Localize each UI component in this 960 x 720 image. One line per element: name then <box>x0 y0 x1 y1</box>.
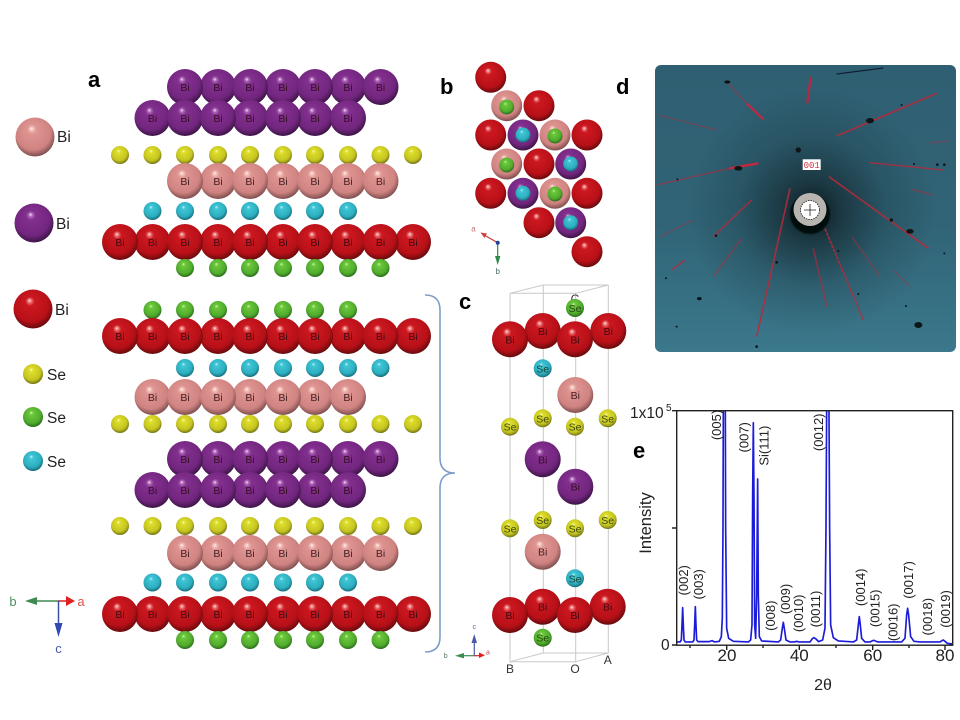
label a: a <box>88 67 101 92</box>
red Bi row 3 <box>102 596 431 632</box>
purple Bi row 3: Bi <box>180 454 190 466</box>
purple Bi row 1: Bi <box>245 82 255 94</box>
axes c: a <box>486 650 490 656</box>
red Bi row 2: Bi <box>213 331 223 343</box>
red Bi row 1: Bi <box>245 237 255 249</box>
pink Bi row 2: Bi <box>180 392 190 404</box>
atoms cell: Se <box>536 413 549 425</box>
pink Bi row 1: Bi <box>245 176 255 188</box>
atoms cell: Se <box>569 422 582 434</box>
atoms cell: Bi <box>538 454 547 466</box>
atoms cell: Se <box>601 413 614 425</box>
peak labels: (0016) <box>886 604 900 641</box>
peak labels: (009) <box>778 584 793 614</box>
panel: a layered structure <box>88 67 455 652</box>
pink Bi row 3 <box>167 535 398 571</box>
purple Bi row 4: Bi <box>180 485 190 497</box>
atoms cell: C <box>571 292 580 306</box>
pink Bi row 3: Bi <box>213 548 223 560</box>
purple Bi row 2: Bi <box>278 113 288 125</box>
pink Bi row 2: Bi <box>148 392 157 404</box>
pink Bi row 2: Bi <box>245 392 255 404</box>
peak labels: (0017) <box>901 561 916 599</box>
red Bi row 3: Bi <box>408 609 418 621</box>
purple Bi row 1: Bi <box>376 82 385 94</box>
x axis labels: 2θ <box>814 677 832 694</box>
legend green Se: Se <box>47 410 66 427</box>
cyan Se row 1 <box>144 202 357 220</box>
legend pink Bi: Bi <box>57 129 71 146</box>
legend red Bi: Bi <box>55 302 69 319</box>
red Bi row 2: Bi <box>376 331 385 343</box>
red Bi row 3: Bi <box>278 609 288 621</box>
beam stop <box>790 193 830 234</box>
red Bi row 3: Bi <box>148 609 157 621</box>
axes: a b c orientation: a <box>77 594 85 609</box>
peak labels: (005) <box>709 410 724 440</box>
atoms cell: Bi <box>538 602 547 614</box>
y axis labels: 0 <box>661 637 670 654</box>
red Bi row 2: Bi <box>180 331 190 343</box>
purple Bi row 1: Bi <box>213 82 223 94</box>
axes: a b c orientation: c <box>55 641 62 656</box>
cyan Se row 2 <box>176 359 390 377</box>
x axis labels <box>718 646 954 694</box>
legend green Se <box>23 407 66 427</box>
axes c: c <box>473 624 477 631</box>
axes c <box>444 624 490 660</box>
y axis labels: 1x10 <box>630 405 664 422</box>
atoms cell: Se <box>504 422 517 434</box>
atoms cell: Bi <box>505 610 515 622</box>
red Bi row 1: Bi <box>180 237 190 249</box>
atoms cell: Bi <box>571 482 580 494</box>
cell box <box>510 285 608 662</box>
chart frame and ticks <box>672 411 953 650</box>
legend yellow Se <box>23 364 66 384</box>
axes: a b c orientation <box>9 594 85 656</box>
red diffraction streaks <box>657 77 950 337</box>
x axis labels: 60 <box>863 646 882 665</box>
peak labels: (0014) <box>853 569 868 606</box>
red Bi row 3: Bi <box>115 609 125 621</box>
legend cyan Se: Se <box>47 454 66 471</box>
purple Bi row 1: Bi <box>180 82 190 94</box>
atoms cell: Se <box>569 303 582 315</box>
legend yellow Se: Se <box>47 367 66 384</box>
x axis labels: 80 <box>936 646 954 665</box>
red Bi row 3: Bi <box>376 609 385 621</box>
red Bi row 1: Bi <box>148 237 157 249</box>
purple Bi row 1 <box>167 69 398 105</box>
y axis labels <box>630 403 672 654</box>
red Bi row 1: Bi <box>408 237 418 249</box>
red Bi row 1: Bi <box>343 237 353 249</box>
peak labels: (008) <box>763 601 778 631</box>
peak labels: (0011) <box>808 591 823 627</box>
green Se row 2 <box>144 301 357 319</box>
panel: d Laue diffraction image <box>655 65 956 352</box>
label b: b <box>440 74 453 99</box>
purple Bi row 4 <box>134 472 366 508</box>
red Bi row 2: Bi <box>148 331 157 343</box>
red Bi row 3: Bi <box>180 609 190 621</box>
peak labels: Si(111) <box>756 426 772 466</box>
peak labels: (0015) <box>868 590 882 627</box>
pink Bi row 1: Bi <box>213 176 223 188</box>
pink Bi row 3: Bi <box>278 548 288 560</box>
atoms cell: Se <box>504 523 517 535</box>
peak labels: (003) <box>691 569 706 599</box>
atoms cell: Se <box>601 515 614 527</box>
atoms cell: Se <box>536 633 549 645</box>
cyan Se row 3 <box>144 574 357 592</box>
axes: a b c orientation: b <box>9 594 17 609</box>
atoms cell: Bi <box>571 390 580 402</box>
purple Bi row 1: Bi <box>310 82 320 94</box>
peak labels: (0018) <box>920 598 935 635</box>
yellow Se row 2 <box>111 415 422 433</box>
purple Bi row 2: Bi <box>343 113 353 125</box>
peak labels: (0019) <box>938 590 953 628</box>
red Bi row 1: Bi <box>310 237 320 249</box>
atoms cell <box>492 292 626 647</box>
purple Bi row 2: Bi <box>245 113 255 125</box>
purple Bi row 2: Bi <box>213 113 223 125</box>
purple Bi row 4: Bi <box>278 485 288 497</box>
green Se row 3 <box>176 631 390 649</box>
panel: c unit cell <box>444 285 626 676</box>
pink Bi row 1 <box>167 163 398 199</box>
legend red Bi <box>14 290 69 328</box>
label c: c <box>459 289 471 314</box>
pink Bi row 3: Bi <box>343 548 353 560</box>
unit cell brace <box>425 295 455 652</box>
yellow Se row 1 <box>111 146 422 164</box>
purple Bi row 1: Bi <box>343 82 353 94</box>
cell corner labels: A <box>604 653 612 667</box>
purple Bi row 4: Bi <box>343 485 353 497</box>
atoms cell: Bi <box>570 610 580 622</box>
red Bi row 3: Bi <box>310 609 320 621</box>
peak labels: (0010) <box>791 595 806 632</box>
atoms cell: Se <box>536 515 549 527</box>
atoms cell: Bi <box>505 334 515 346</box>
purple Bi row 2: Bi <box>310 113 320 125</box>
red Bi row 1 <box>102 224 431 260</box>
pink Bi row 3: Bi <box>310 548 320 560</box>
red Bi row 3: Bi <box>245 609 255 621</box>
red Bi row 1: Bi <box>278 237 288 249</box>
purple Bi row 3: Bi <box>213 454 223 466</box>
pink Bi row 2: Bi <box>343 392 353 404</box>
purple Bi row 3: Bi <box>278 454 288 466</box>
pink Bi row 3: Bi <box>180 548 190 560</box>
red Bi row 3: Bi <box>213 609 223 621</box>
y axis labels: 5 <box>666 403 672 414</box>
panel: e XRD chart <box>630 403 954 694</box>
purple Bi row 4: Bi <box>245 485 255 497</box>
pink Bi row 1: Bi <box>343 176 353 188</box>
red Bi row 2: Bi <box>278 331 288 343</box>
purple Bi row 4: Bi <box>213 485 223 497</box>
pink Bi row 2: Bi <box>213 392 223 404</box>
atoms cell: Se <box>536 363 549 375</box>
y axis labels: Intensity <box>637 492 655 554</box>
pink Bi row 1: Bi <box>278 176 288 188</box>
atoms cell: Se <box>569 573 582 585</box>
legend purple Bi: Bi <box>56 216 70 233</box>
purple Bi row 3: Bi <box>343 454 353 466</box>
x axis labels: 20 <box>718 646 736 665</box>
atoms cell: Se <box>569 523 582 535</box>
legend: atom species <box>14 118 71 471</box>
red Bi row 2 <box>102 318 431 354</box>
red Bi row 1: Bi <box>376 237 385 249</box>
pink Bi row 2 <box>134 379 366 415</box>
legend purple Bi <box>14 204 70 242</box>
pink Bi row 1: Bi <box>310 176 320 188</box>
spot label 001: 001 <box>804 161 820 171</box>
axes b: a <box>471 224 476 234</box>
label d: d <box>616 74 629 99</box>
axes b: b <box>495 267 500 276</box>
purple Bi row 3: Bi <box>245 454 255 466</box>
pink Bi row 3: Bi <box>376 548 385 560</box>
cell corner labels <box>506 653 612 676</box>
purple Bi row 4: Bi <box>148 485 157 497</box>
cell corner labels: O <box>570 662 580 676</box>
red Bi row 2: Bi <box>245 331 255 343</box>
pink Bi row 3: Bi <box>245 548 255 560</box>
purple Bi row 2: Bi <box>180 113 190 125</box>
purple Bi row 1: Bi <box>278 82 288 94</box>
legend pink Bi <box>16 118 71 156</box>
cell corner labels: B <box>506 662 514 676</box>
purple Bi row 2 <box>134 100 366 136</box>
atoms cell: Bi <box>570 334 580 346</box>
red Bi row 2: Bi <box>343 331 353 343</box>
green Se row 1 <box>176 259 390 277</box>
atoms cell: Bi <box>538 326 547 338</box>
panel: b top view <box>440 62 602 276</box>
purple Bi row 3: Bi <box>310 454 320 466</box>
axes c: b <box>444 653 448 660</box>
red Bi row 2: Bi <box>310 331 320 343</box>
yellow Se row 3 <box>111 517 422 535</box>
purple Bi row 3 <box>167 441 398 477</box>
red Bi row 2: Bi <box>115 331 125 343</box>
spectrum <box>677 411 953 644</box>
pink Bi row 2: Bi <box>278 392 288 404</box>
atoms cell: Bi <box>604 326 613 338</box>
pink Bi row 1: Bi <box>376 176 385 188</box>
peak labels: (0012) <box>811 414 826 451</box>
peak labels <box>676 410 953 641</box>
red Bi row 2: Bi <box>408 331 418 343</box>
label e: e <box>633 438 645 463</box>
red Bi row 1: Bi <box>115 237 125 249</box>
peak labels: (002) <box>676 565 691 595</box>
peak labels: (007) <box>736 422 752 452</box>
atoms cell: Bi <box>603 602 612 614</box>
red Bi row 3: Bi <box>343 609 353 621</box>
axes b <box>471 224 500 276</box>
pink Bi row 2: Bi <box>310 392 320 404</box>
pink Bi row 1: Bi <box>180 176 190 188</box>
purple Bi row 3: Bi <box>376 454 385 466</box>
legend cyan Se <box>23 451 66 471</box>
dark diffraction spots <box>665 68 946 348</box>
atoms top view <box>475 62 602 267</box>
x axis labels: 40 <box>790 646 809 665</box>
purple Bi row 4: Bi <box>310 485 320 497</box>
atoms cell: Bi <box>538 547 547 559</box>
purple Bi row 2: Bi <box>148 113 157 125</box>
red Bi row 1: Bi <box>213 237 223 249</box>
